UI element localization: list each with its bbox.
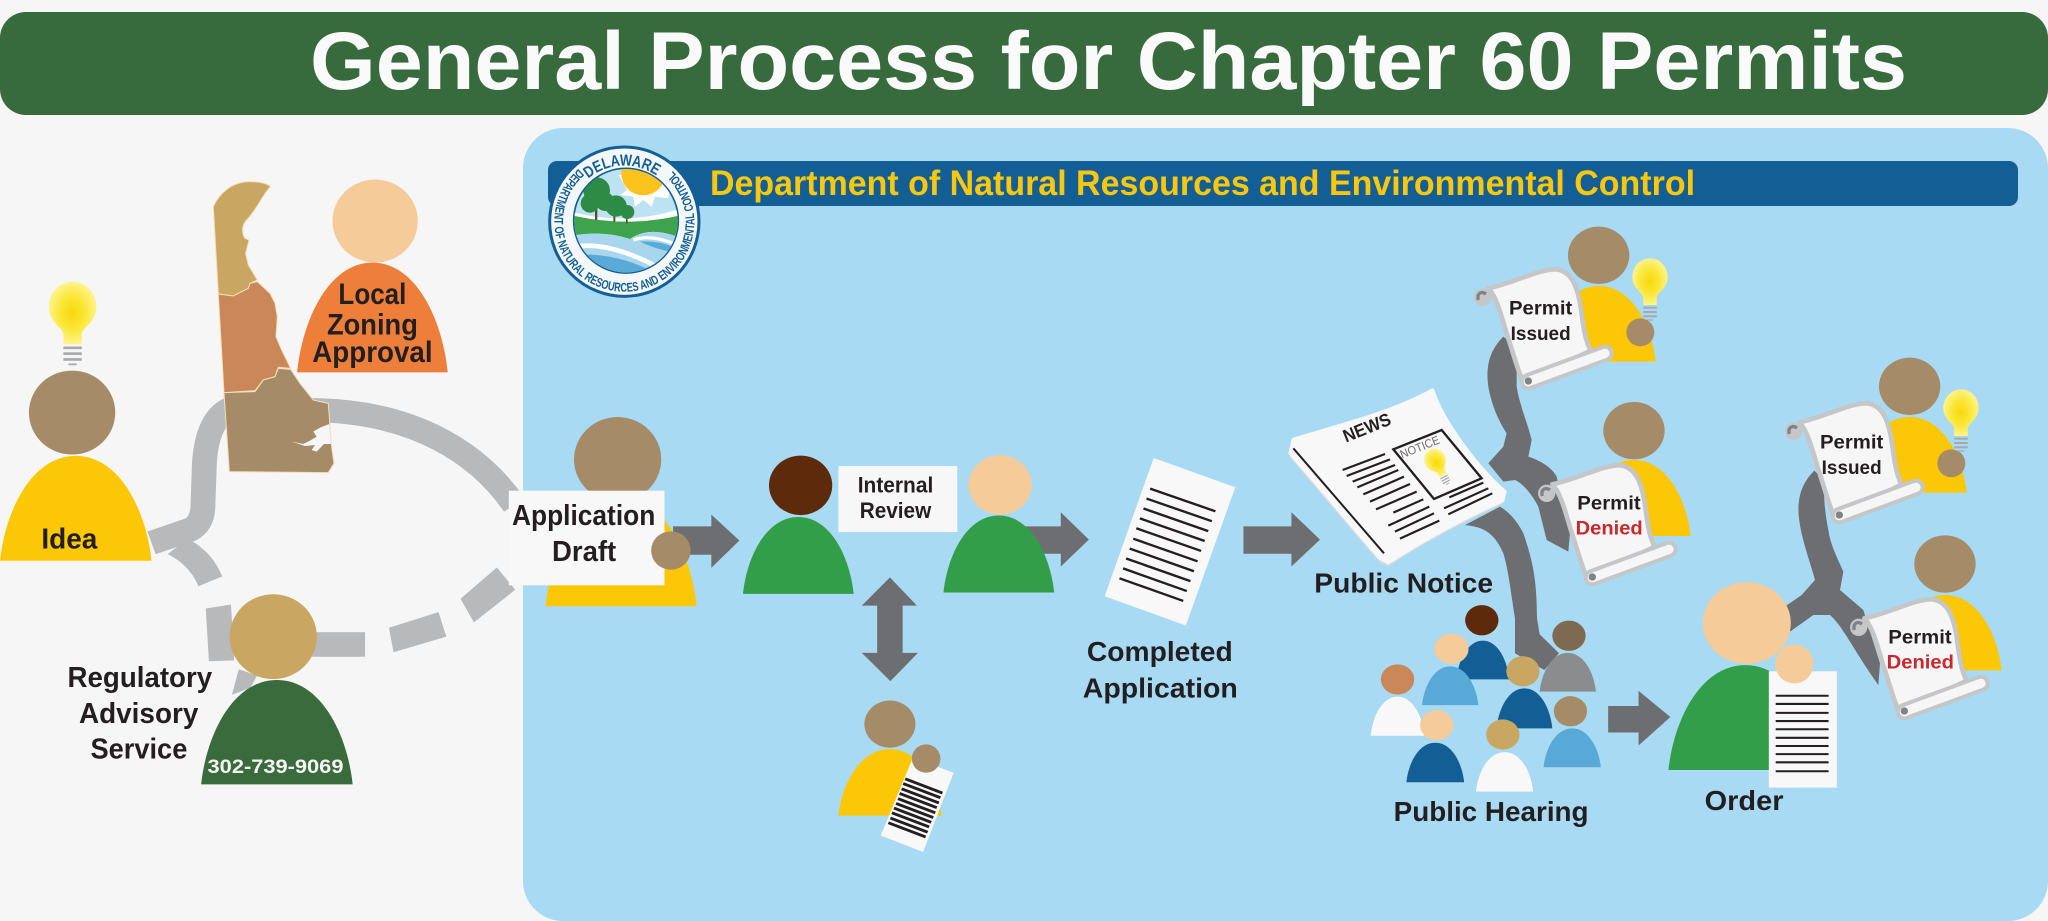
scroll: order permit issued: Permit (1820, 432, 1884, 453)
icon: newspaper public notice: NOTICE (1398, 433, 1442, 461)
panel: internal review section (743, 455, 1320, 852)
scroll: permit denied (1538, 465, 1669, 581)
arrow: order branches to permit outcomes (1785, 471, 1880, 685)
scroll: order permit issued (1785, 403, 1916, 519)
label: public notice: Public Notice (1314, 568, 1493, 599)
person: local zoning approval (297, 180, 448, 372)
person: order official with document (1668, 582, 1837, 788)
panel: pre-application section (0, 180, 697, 784)
label: completed application: Completed (1087, 637, 1233, 668)
arrow: draft to internal review (673, 515, 739, 568)
public hearing crowd (1371, 605, 1601, 792)
label: order: Order (1705, 786, 1784, 816)
arrow: double-headed to applicant (862, 577, 918, 681)
title banner (0, 12, 2048, 115)
scroll: permit issued: Permit (1509, 298, 1573, 319)
department header bar (548, 161, 2018, 206)
icon: department seal: DELAWARE (582, 154, 662, 178)
scroll: order permit denied: Permit (1888, 627, 1952, 648)
icon: newspaper public notice (1290, 390, 1505, 566)
person: local zoning approval: Zoning (327, 309, 418, 341)
icon: completed application document (1105, 458, 1235, 625)
arrow: notice to public hearing (1465, 507, 1559, 670)
scroll: permit denied: Permit (1577, 493, 1641, 514)
label: completed application: Application (1083, 674, 1238, 704)
icon: department seal: DEPARTMENT OF NATURAL RESOURCES AND ENVIRONMENTAL CONTROL (554, 169, 694, 292)
label: regulatory advisory service: Regulatory (68, 662, 212, 694)
person: final permit holder issued (1853, 358, 1979, 493)
person: reviewer two (943, 455, 1054, 592)
arrow: dashed route through advisory service (168, 538, 515, 695)
internal review label: Review (860, 498, 931, 523)
label: public hearing: Public Hearing (1394, 797, 1589, 827)
scroll: order permit denied: Denied (1887, 653, 1954, 674)
label: completed application (1083, 637, 1238, 704)
arrow: solid route to application (152, 409, 514, 543)
arrow: review to completed application (1025, 512, 1089, 567)
scroll: permit issued: Issued (1511, 324, 1571, 345)
label: regulatory advisory service: Service (90, 734, 187, 765)
person: reviewer one (743, 456, 854, 594)
internal review label (838, 466, 957, 532)
person: regulatory advisory service: 302-739-9069 (208, 756, 343, 778)
panel: public hearing and order (1314, 568, 1837, 827)
person: idea (0, 282, 152, 561)
label: regulatory advisory service: Advisory (79, 698, 198, 730)
scroll: permit issued (1474, 269, 1605, 385)
person: final permit holder denied (1888, 535, 2002, 670)
person: local zoning approval: Approval (312, 336, 433, 369)
title: General Process for Chapter 60 Permits (310, 16, 1907, 107)
person: permit holder issued (1542, 227, 1668, 362)
panel: department (523, 128, 2048, 921)
arrow: application to public notice (1243, 512, 1320, 567)
person: local zoning approval: Local (338, 278, 406, 311)
arrow: notice branches to permit outcomes (1487, 337, 1570, 552)
icon: light bulb (1943, 389, 1979, 452)
scroll: order permit issued: Issued (1822, 458, 1882, 479)
person: application draft: Application (512, 500, 655, 532)
icon: newspaper public notice: NEWS (1340, 409, 1394, 446)
scroll: order permit denied (1850, 599, 1981, 715)
person: application draft (509, 417, 697, 606)
person: regulatory advisory service (201, 594, 353, 784)
person: application draft: Draft (552, 536, 617, 568)
internal review label: Internal (858, 472, 933, 497)
icon: light bulb (1632, 258, 1668, 321)
icon: notice light bulb (1420, 445, 1457, 489)
map of Delaware (213, 182, 334, 473)
arrow: hearing to order (1608, 691, 1670, 746)
person: applicant with document (838, 701, 954, 852)
person: permit holder denied (1577, 402, 1691, 536)
person: idea: Idea (41, 524, 98, 556)
scroll: permit denied: Denied (1576, 518, 1643, 539)
icon: light bulb (49, 282, 96, 365)
label: regulatory advisory service (68, 662, 212, 765)
department heading: Department of Natural Resources and Environmental Control (710, 164, 1695, 203)
